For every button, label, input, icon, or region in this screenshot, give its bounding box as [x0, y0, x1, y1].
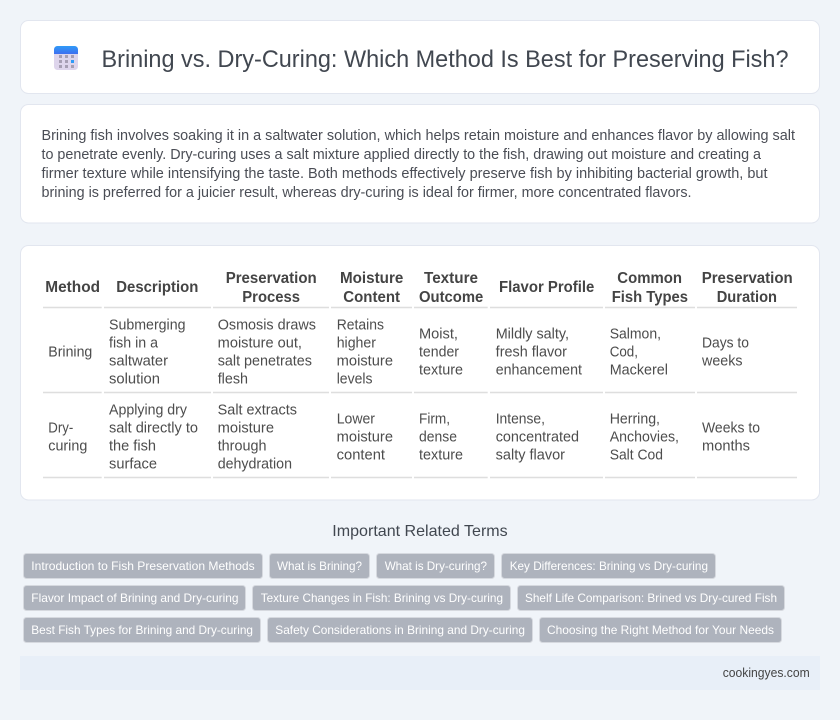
table row: Dry-curing: texture	[419, 448, 463, 464]
table row: Brining: Retains	[337, 317, 384, 333]
table row: Brining: saltwater	[109, 353, 168, 369]
tag: Key Differences: Brining vs Dry-curing	[510, 559, 708, 573]
table row: Dry-curing: Herring,	[610, 412, 660, 428]
tag: Introduction to Fish Preservation Methods	[31, 559, 255, 573]
intro text	[42, 128, 795, 201]
related terms heading: Important Related Terms	[332, 523, 508, 540]
table row: Brining: Osmosis draws	[218, 317, 316, 333]
tag	[270, 554, 370, 578]
table header row: Duration	[717, 289, 777, 306]
header panel	[20, 20, 820, 94]
tag: What is Brining?	[277, 559, 362, 573]
table row: Dry-curing: Dry-	[48, 421, 73, 437]
table row: Brining: Moist,	[419, 326, 458, 342]
tag: Shelf Life Comparison: Brined vs Dry-cured Fish	[525, 591, 777, 605]
table header row: Moisture	[340, 270, 403, 287]
tag	[252, 586, 510, 610]
table row: Dry-curing: through	[218, 439, 266, 455]
table header row	[45, 270, 793, 306]
tag: Safety Considerations in Brining and Dry-curing	[275, 623, 525, 637]
table row: Brining: Days to	[702, 335, 749, 351]
tag	[268, 618, 532, 642]
related terms tags	[24, 554, 784, 642]
table row: Dry-curing: moisture	[218, 421, 274, 437]
table row: Brining: Mildly salty,	[496, 326, 569, 342]
table row: Dry-curing: months	[702, 439, 750, 455]
table row: Dry-curing: the fish	[109, 439, 156, 455]
table row: Brining: fish in a	[109, 335, 158, 351]
tag: Texture Changes in Fish: Brining vs Dry-curing	[261, 591, 503, 605]
table row: Brining: Submerging	[109, 317, 186, 333]
table header row: Preservation	[226, 270, 317, 287]
table row: Brining: Mackerel	[610, 362, 668, 378]
table row: Brining: flesh	[218, 371, 248, 387]
intro panel	[20, 104, 820, 223]
table header row: Content	[343, 289, 401, 306]
table row: Dry-curing: salt directly to	[109, 421, 198, 437]
table row: Dry-curing: Salt Cod	[610, 448, 663, 464]
table row: Dry-curing: Weeks to	[702, 421, 760, 437]
table row: Brining: texture	[419, 362, 463, 378]
table row: Brining: Cod,	[610, 344, 638, 360]
table row: Dry-curing: Salt extracts	[218, 403, 297, 419]
table row: Brining: Brining	[48, 344, 92, 360]
table header row: Process	[242, 289, 300, 306]
intro text: Brining fish involves soaking it in a saltwater solution, which helps retain moisture and enhances flavor by allowing salt	[42, 128, 795, 144]
table row: Brining: enhancement	[496, 362, 582, 378]
table header row: Method	[45, 279, 100, 296]
table row: Brining	[48, 317, 749, 387]
table row: Dry-curing: dense	[419, 430, 457, 446]
table row: Dry-curing: Applying dry	[109, 403, 188, 419]
icon: calendar	[54, 46, 78, 70]
title: Brining vs. Dry-Curing: Which Method Is Best for Preserving Fish?	[102, 46, 788, 73]
table row: Dry-curing: Lower	[337, 412, 375, 428]
table row: Dry-curing: Anchovies,	[610, 430, 679, 446]
tag	[24, 554, 262, 578]
table row: Brining: Salmon,	[610, 326, 661, 342]
tag: Flavor Impact of Brining and Dry-curing	[31, 591, 238, 605]
intro text: to penetrate evenly. Dry-curing uses a salt mixture applied directly to the fish, drawing out moisture and creating a	[42, 147, 761, 163]
table row: Dry-curing: content	[337, 448, 385, 464]
table row: Dry-curing: concentrated	[496, 430, 579, 446]
intro text: firmer texture while intensifying the taste. Both methods effectively preserve fish by inhibiting bacterial growth, but	[42, 166, 768, 182]
table row: Brining: higher	[337, 335, 376, 351]
table row: Brining: tender	[419, 344, 459, 360]
table row: Dry-curing: dehydration	[218, 457, 292, 473]
table row: Brining: solution	[109, 371, 160, 387]
comparison table panel	[20, 246, 820, 500]
tag: Best Fish Types for Brining and Dry-curing	[31, 623, 253, 637]
tag	[24, 586, 246, 610]
tag	[502, 554, 716, 578]
intro text: brining is preferred for a juicier result, whereas dry-curing is ideal for firmer, more concentrated flavors.	[42, 185, 692, 201]
table header row: Preservation	[702, 270, 793, 287]
tag	[540, 618, 782, 642]
table row: Brining: moisture	[337, 353, 393, 369]
table row: Dry-curing: Firm,	[419, 412, 450, 428]
tag	[376, 554, 494, 578]
table row: Brining: fresh flavor	[496, 344, 567, 360]
table row: Dry-curing: curing	[48, 439, 87, 455]
table row: Brining: salt penetrates	[218, 353, 312, 369]
table row: Brining: moisture out,	[218, 335, 302, 351]
table row: Dry-curing	[48, 403, 760, 473]
table row: Dry-curing: salty flavor	[496, 448, 565, 464]
table row: Brining: levels	[337, 371, 372, 387]
footer bar	[20, 656, 820, 690]
table header row: Fish Types	[612, 289, 688, 306]
table row: Brining: weeks	[701, 353, 742, 369]
tag	[518, 586, 784, 610]
table header row: Texture	[424, 270, 478, 287]
tag	[24, 618, 260, 642]
tag: Choosing the Right Method for Your Needs	[547, 623, 774, 637]
footer source text: cookingyes.com	[723, 666, 810, 680]
table header row: Description	[116, 279, 198, 296]
table row: Dry-curing: moisture	[337, 430, 393, 446]
tag: What is Dry-curing?	[385, 559, 487, 573]
table header row: Flavor Profile	[499, 279, 594, 296]
table header row: Common	[617, 270, 682, 287]
table row: Dry-curing: surface	[109, 457, 157, 473]
table header row: Outcome	[419, 289, 483, 306]
table row: Dry-curing: Intense,	[496, 412, 545, 428]
